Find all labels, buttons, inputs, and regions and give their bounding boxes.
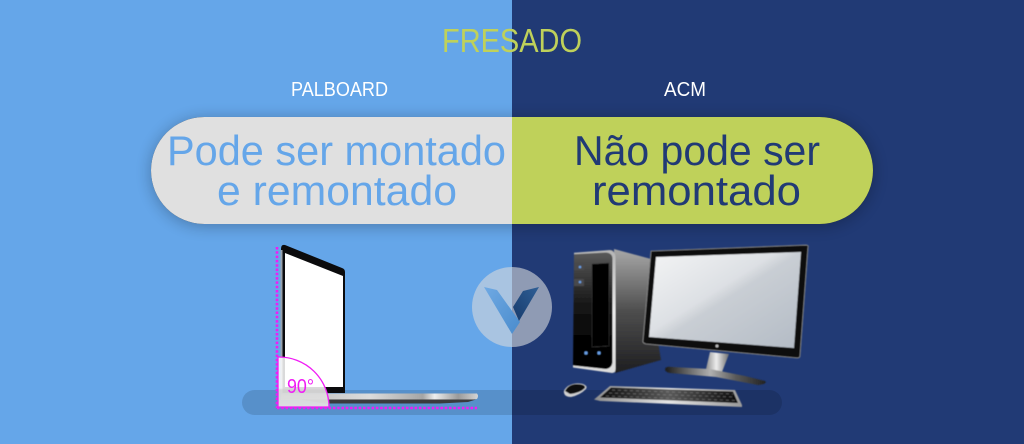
dotted vertical guide (276, 247, 278, 408)
text: left statement (167, 127, 506, 214)
tower buttons (574, 263, 584, 286)
shadow band under devices (242, 390, 782, 415)
title: FRESADO (442, 22, 582, 59)
keyboard keys (606, 390, 736, 400)
pill: left half (151, 117, 512, 224)
heading: ACM: ACM (664, 79, 706, 101)
pill: right half (512, 117, 873, 224)
laptop lid edge (280, 250, 282, 393)
mouse (564, 383, 587, 397)
tower side (614, 249, 661, 373)
text: right statement: Não pode ser (574, 127, 820, 174)
logo: circle with V (472, 267, 552, 347)
tower rim (573, 250, 616, 373)
text: right statement (574, 127, 820, 214)
monitor screen (649, 252, 801, 348)
laptop lid (281, 245, 345, 393)
comparison pill (151, 117, 873, 224)
heading: Palboard: PALBOARD (291, 79, 388, 101)
laptop screen (285, 253, 343, 387)
monitor frame (643, 245, 808, 358)
laptop base (281, 394, 478, 400)
icon: open laptop at 90 degrees (277, 245, 478, 408)
text: left statement: e remontado (217, 167, 457, 214)
text: left statement: Pode ser montado (167, 127, 506, 174)
panel: right navy background (512, 0, 1024, 444)
tower front (573, 250, 615, 373)
monitor stand (706, 352, 729, 372)
text: right statement: remontado (592, 167, 801, 214)
tower bay (592, 263, 609, 347)
keyboard (594, 386, 742, 407)
dotted horizontal guide (277, 407, 477, 409)
angle label: 90° (287, 376, 314, 398)
icon: desktop computer (564, 245, 808, 407)
panel: left blue background (0, 0, 512, 444)
angle wedge (278, 357, 329, 407)
